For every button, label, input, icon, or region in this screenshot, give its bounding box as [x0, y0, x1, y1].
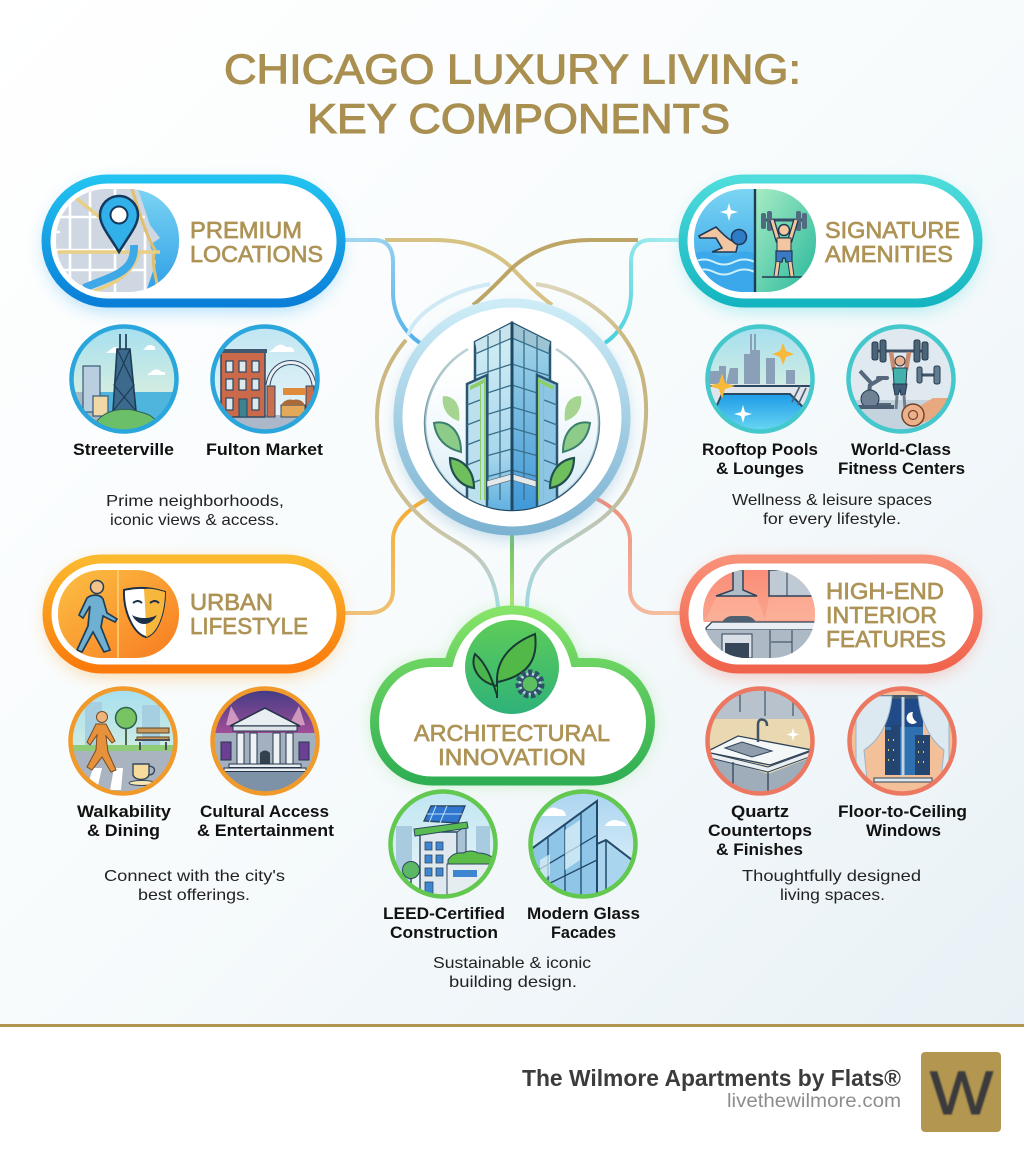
icon: gym equipment — [847, 325, 955, 434]
icon: walker and theatre mask — [58, 570, 179, 658]
website: livethewilmore.com — [727, 1091, 901, 1112]
label: Windows — [866, 821, 941, 840]
description — [106, 493, 284, 529]
hub ring — [394, 303, 630, 541]
label — [708, 802, 812, 859]
description — [433, 955, 591, 991]
label: Cultural Access — [200, 802, 329, 821]
description: living spaces. — [780, 887, 885, 904]
logo: W — [930, 1059, 993, 1127]
label: Construction — [390, 923, 498, 942]
label: Quartz — [731, 802, 789, 821]
panel: architectural innovation — [374, 610, 651, 991]
item: rooftop pools — [702, 325, 818, 478]
heading: SIGNATURE — [825, 217, 960, 243]
description — [104, 868, 285, 904]
panel: premium locations — [46, 179, 341, 529]
label: Floor-to-Ceiling — [838, 802, 967, 821]
item: streeterville — [70, 325, 178, 459]
heading: INNOVATION — [438, 744, 586, 770]
label: LEED-Certified — [383, 904, 505, 923]
item: fitness centers — [838, 325, 965, 478]
heading: LIFESTYLE — [190, 613, 308, 639]
label — [527, 904, 640, 942]
heading: ARCHITECTURAL — [414, 720, 610, 746]
heading: HIGH-END — [826, 578, 944, 604]
label: Streeterville — [73, 440, 174, 459]
label — [77, 802, 172, 840]
icon: glass tower with leaves — [425, 323, 599, 512]
heading: AMENITIES — [825, 241, 953, 267]
description: iconic views & access. — [110, 512, 279, 529]
item: cultural access — [197, 687, 334, 840]
panel: signature amenities — [683, 179, 978, 528]
description — [742, 868, 921, 904]
heading — [190, 217, 323, 267]
heading — [414, 720, 610, 770]
label: & Dining — [87, 821, 160, 840]
footer — [0, 1024, 1024, 1154]
icon: theatre building — [211, 687, 319, 796]
heading — [826, 578, 946, 652]
panel: urban lifestyle — [47, 559, 341, 904]
label: & Lounges — [716, 459, 804, 478]
label: & Entertainment — [197, 821, 334, 840]
label — [702, 440, 818, 478]
title — [224, 46, 801, 142]
icon: glass facade — [529, 790, 637, 898]
heading — [825, 217, 960, 267]
logo — [921, 1052, 1001, 1132]
item: floor-to-ceiling windows — [838, 687, 967, 840]
icon: swimmer and weightlifter — [694, 189, 816, 292]
cloud container — [374, 610, 651, 782]
label — [838, 802, 967, 840]
icon: quartz counter and sink — [706, 687, 814, 795]
label: Walkability — [77, 802, 172, 821]
icon: night window with curtains — [848, 687, 956, 795]
heading: LOCATIONS — [190, 241, 323, 267]
icon: green building with solar panel — [389, 790, 497, 898]
description: Sustainable & iconic — [433, 955, 591, 972]
icon: pedestrian street — [69, 687, 177, 796]
item: modern glass facades — [527, 790, 640, 942]
label: Rooftop Pools — [702, 440, 818, 459]
icon: skyline and lake — [70, 325, 178, 433]
heading: FEATURES — [826, 626, 946, 652]
pill: signature amenities — [683, 179, 978, 310]
icon: leaves — [434, 396, 590, 488]
brand name: The Wilmore Apartments by Flats® — [522, 1065, 901, 1091]
label: Modern Glass — [527, 904, 640, 923]
title: KEY COMPONENTS — [307, 95, 730, 142]
label: Fitness Centers — [838, 459, 965, 478]
connector lines — [345, 240, 680, 613]
item: fulton market — [206, 325, 323, 459]
description: best offerings. — [138, 887, 250, 904]
label: Countertops — [708, 821, 812, 840]
label — [383, 904, 505, 942]
heading: PREMIUM — [190, 217, 302, 243]
label: Facades — [551, 923, 616, 942]
icon: kitchen — [703, 570, 815, 658]
heading: URBAN — [190, 589, 273, 615]
panel: high-end interior features — [684, 559, 978, 904]
pill: urban lifestyle — [47, 559, 341, 676]
heading: INTERIOR — [826, 602, 937, 628]
label: & Finishes — [716, 840, 803, 859]
label — [838, 440, 965, 478]
label — [197, 802, 334, 840]
description: Wellness & leisure spaces — [732, 492, 932, 509]
icon: leaf and gear — [465, 620, 559, 714]
description: building design. — [449, 974, 577, 991]
title: CHICAGO LUXURY LIVING: — [224, 46, 801, 92]
description: Prime neighborhoods, — [106, 493, 284, 510]
item: quartz countertops — [706, 687, 814, 859]
heading — [190, 589, 308, 639]
item: walkability — [69, 687, 177, 840]
label: Fulton Market — [206, 440, 323, 459]
pill: high-end interior features — [684, 559, 978, 676]
description: for every lifestyle. — [763, 511, 901, 528]
description — [732, 492, 932, 528]
icon: map pin — [56, 189, 179, 292]
description: Connect with the city's — [104, 868, 285, 885]
icon: rooftop pool — [704, 325, 814, 434]
central hub — [394, 303, 630, 541]
pill: premium locations — [46, 179, 341, 310]
icon: brick building and market arch — [211, 325, 319, 435]
item: leed-certified construction — [383, 790, 505, 942]
description: Thoughtfully designed — [742, 868, 921, 885]
label: World-Class — [851, 440, 951, 459]
